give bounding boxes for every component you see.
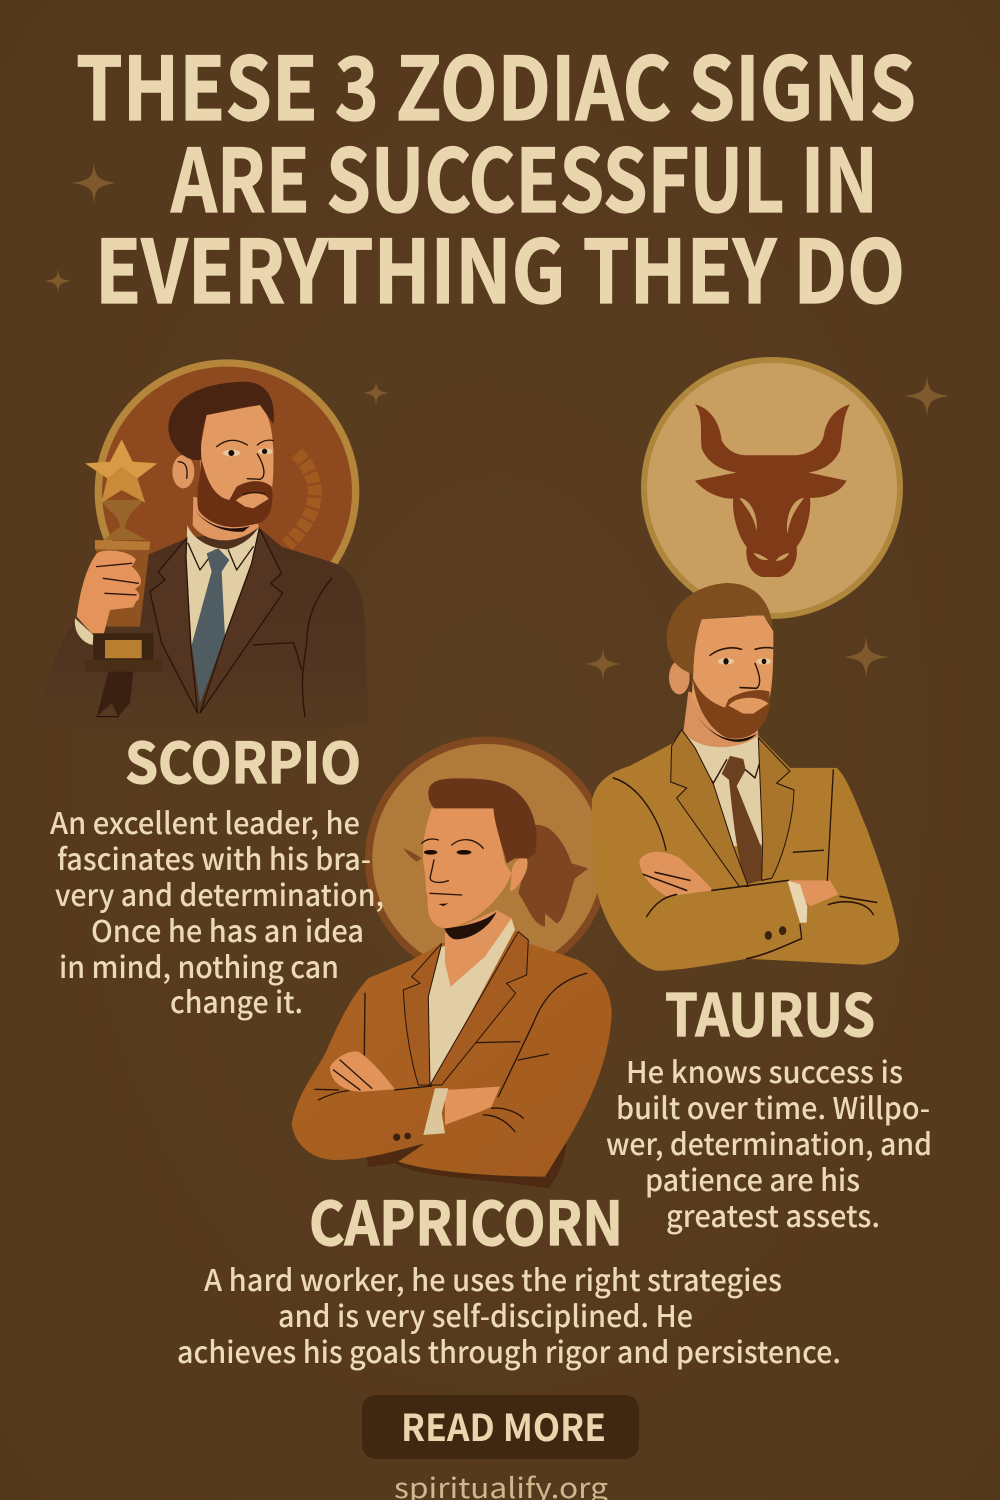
text: Taurus description: built over time. Willpo- — [616, 1084, 930, 1128]
text: Capricorn description — [177, 1256, 841, 1372]
Scorpio medallion — [98, 363, 356, 620]
Capricorn figure — [292, 778, 612, 1188]
shadow — [367, 1137, 567, 1188]
crossed arms — [613, 770, 877, 959]
text: Taurus description: patience are his — [645, 1156, 860, 1200]
suit — [592, 730, 899, 971]
text: Scorpio description: in mind, nothing can — [59, 943, 339, 987]
text: Scorpio description: change it. — [170, 978, 303, 1022]
decorative sparkles — [45, 161, 949, 682]
text: Capricorn description: achieves his goals through rigor and persistence. — [177, 1328, 841, 1372]
under-chin shadow — [444, 912, 497, 939]
hand holding trophy — [75, 551, 141, 645]
text: Capricorn description: and is very self-disciplined. He — [278, 1292, 693, 1336]
suit — [292, 930, 612, 1177]
text: Taurus description: He knows success is — [626, 1048, 903, 1092]
heading: Capricorn: CAPRICORN — [309, 1176, 623, 1263]
Taurus zodiac medallion — [644, 360, 900, 616]
tie — [722, 756, 762, 884]
lapels — [403, 943, 442, 1085]
text: Scorpio description: An excellent leader, he — [50, 799, 360, 843]
text: Scorpio description: fascinates with his bra- — [57, 835, 371, 879]
head — [168, 382, 274, 532]
trophy — [85, 439, 162, 717]
text: Capricorn description: A hard worker, he uses the right strategies — [204, 1256, 782, 1300]
shirt — [682, 730, 763, 846]
shirt — [186, 525, 259, 645]
tie — [192, 548, 229, 703]
crossed arms — [315, 973, 587, 1141]
Capricorn medallion — [369, 740, 606, 978]
title — [76, 20, 916, 329]
text: Taurus description: wer, determination, and — [606, 1120, 932, 1164]
button: read more: READ MORE — [401, 1398, 606, 1452]
text: Taurus description — [606, 1048, 932, 1236]
heading: Taurus: TAURUS — [665, 969, 875, 1053]
text: Scorpio description — [50, 799, 384, 1022]
head — [422, 778, 537, 928]
shirt — [428, 918, 515, 1085]
button: read more — [362, 1395, 639, 1459]
heading: Scorpio: SCORPIO — [125, 719, 361, 800]
suit — [43, 528, 368, 733]
text: Scorpio description: Once he has an idea — [91, 907, 364, 951]
icon: bull head — [695, 404, 850, 577]
neck — [445, 910, 512, 987]
neck — [683, 692, 758, 747]
head — [667, 583, 773, 742]
text: Taurus description: greatest assets. — [666, 1192, 880, 1236]
Scorpio figure — [43, 363, 368, 733]
lapels — [150, 538, 198, 713]
neck — [193, 497, 259, 540]
text: Scorpio description: very and determination, — [55, 871, 384, 915]
Taurus figure — [592, 583, 899, 971]
lapels — [671, 730, 748, 886]
